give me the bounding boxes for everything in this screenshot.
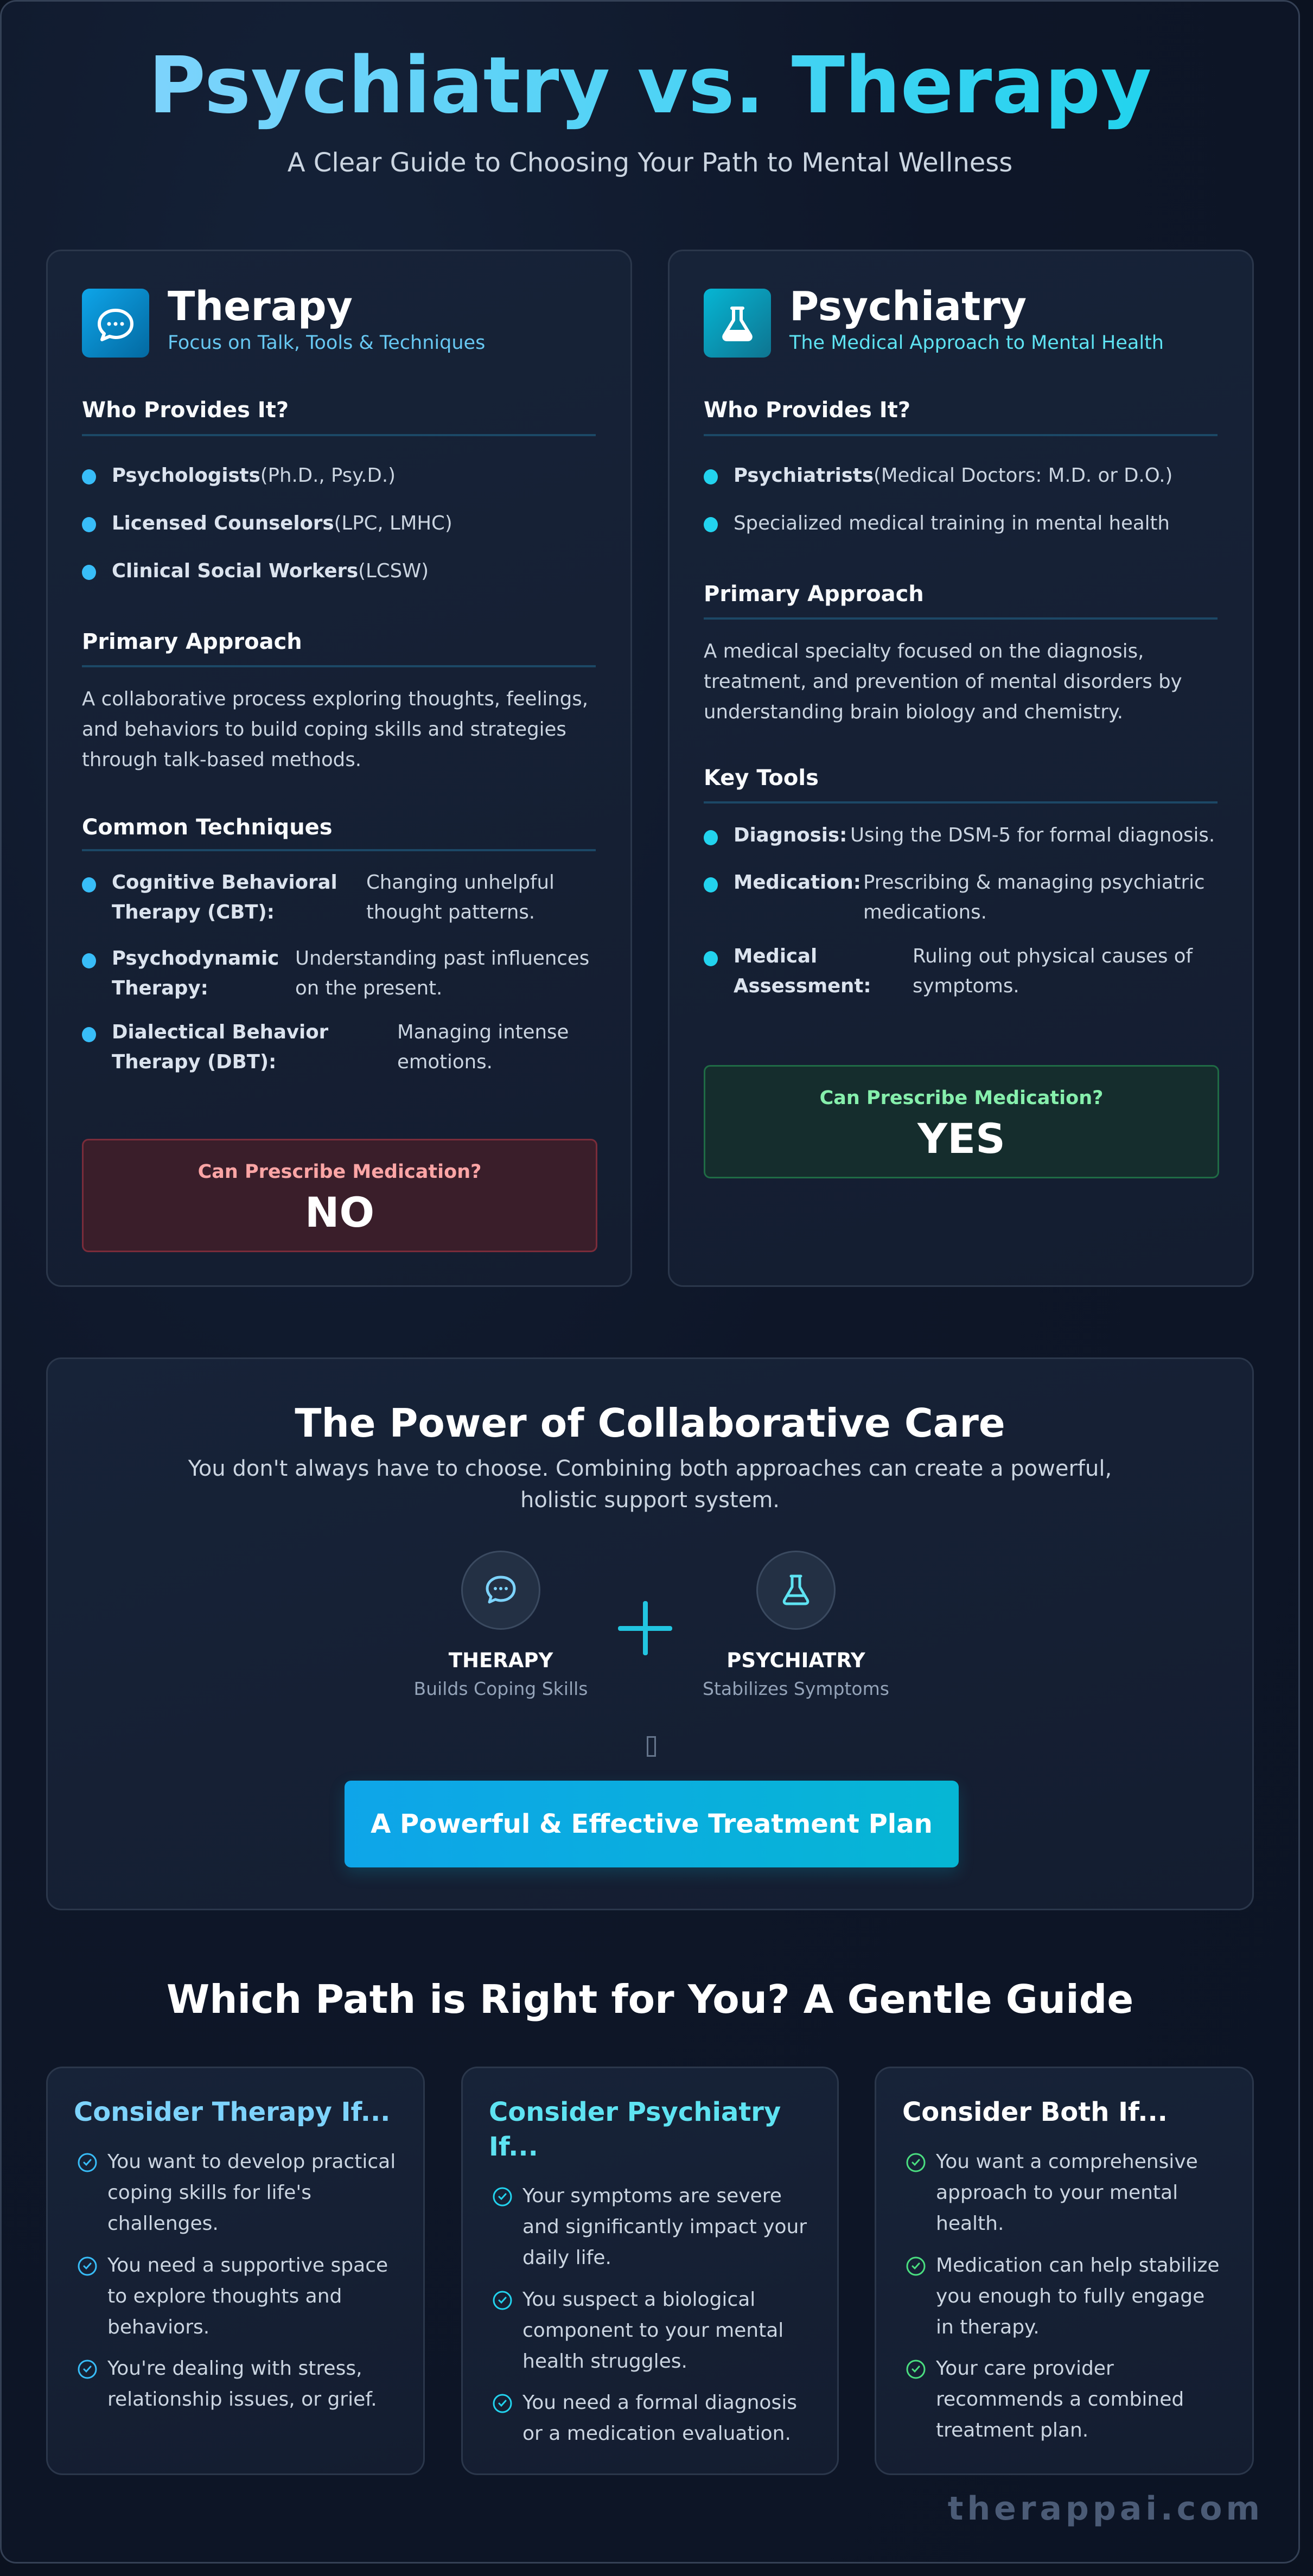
text: approach: treatment, and prevention of mental disorders by [704,671,1182,693]
button: treatment plan: A Powerful & Effective Treatment Plan [371,1809,933,1839]
item list: component to your mental [522,2319,783,2342]
item list: coping skills for life's [107,2182,311,2204]
card: both [875,2067,1254,2475]
heading: Psychiatry: Psychiatry [789,283,1027,330]
heading: who provides: Who Provides It? [82,398,289,423]
card: therapy [46,2067,425,2475]
item list: You want to develop practical [107,2151,396,2173]
item list: You suspect a biological [522,2288,755,2311]
list: techniques: Therapy: [112,977,208,999]
item list: daily life. [522,2247,611,2269]
item list: behaviors. [107,2316,209,2338]
panel: psychiatry [668,250,1254,1287]
list: key tools: Using the DSM-5 for formal diagnosis. [850,824,1215,846]
text: approach: A collaborative process exploring thoughts, feelings, [82,688,588,710]
list: providers [704,464,1172,534]
subheading: The Medical Approach to Mental Health [789,332,1164,354]
item list: Your symptoms are severe [522,2185,782,2207]
callout: NO [82,1139,597,1252]
list: techniques: Changing unhelpful [366,871,554,894]
item list [78,2151,396,2411]
item list: health struggles. [522,2350,687,2373]
arrow glyph (missing) [647,1736,656,1757]
item list: Medication can help stabilize [936,2254,1220,2277]
item list: You want a comprehensive [936,2151,1198,2173]
list: key tools: Ruling out physical causes of [913,945,1193,967]
callout: NO: NO [305,1188,374,1236]
list: techniques: Understanding past influences [295,947,589,970]
item list: You need a supportive space [107,2254,388,2277]
heading: who provides: Who Provides It? [704,398,910,423]
card: both: Consider Both If... [902,2097,1168,2127]
card: psychiatry: Consider Psychiatry [489,2097,781,2127]
list: techniques: Therapy (CBT): [112,901,275,923]
list: techniques: thought patterns. [366,901,535,923]
item list [906,2151,1220,2441]
list: key tools: Medication: [734,871,861,894]
icon: psychiatry circle [756,1551,836,1630]
callout: YES: YES [917,1114,1005,1163]
item list: You need a formal diagnosis [522,2392,797,2414]
card: therapy: Consider Therapy If... [74,2097,390,2127]
text: intro: You don't always have to choose. Combining both approaches can create a powerful, [188,1456,1112,1481]
icon: therapy circle [461,1551,540,1630]
list: techniques: on the present. [295,977,442,999]
heading: primary approach: Primary Approach [704,582,924,607]
list: key tools: Assessment: [734,975,871,997]
item list: you enough to fully engage [936,2285,1204,2307]
card: psychiatry [461,2067,839,2475]
text: intro: holistic support system. [520,1488,780,1513]
list: key tools: medications. [863,901,987,923]
item list: Your care provider [936,2357,1114,2380]
label: therapy: THERAPY [449,1649,553,1672]
text: intro [188,1456,1112,1513]
callout: NO: Can Prescribe Medication? [198,1161,481,1183]
heading: The Power of Collaborative Care [295,1400,1005,1446]
list: providers: Specialized medical training in mental health [734,512,1170,534]
list: techniques: Psychodynamic [112,947,279,970]
label: psychiatry [703,1649,889,1699]
list: key tools: Diagnosis: [734,824,847,846]
label: psychiatry: Stabilizes Symptoms [703,1678,889,1699]
panel: collaborative care [46,1357,1254,1910]
panel: therapy [46,250,632,1287]
item list: health. [936,2212,1004,2235]
text: approach [82,688,588,771]
text: approach: understanding brain biology and chemistry. [704,701,1123,723]
card: psychiatry: or a medication evaluation. [522,2422,791,2445]
list: key tools: Prescribing & managing psychiatric [863,871,1204,894]
callout: YES: Can Prescribe Medication? [820,1087,1103,1109]
item list: to explore thoughts and [107,2285,342,2307]
button: treatment plan [345,1781,959,1867]
heading: Therapy: Therapy [168,283,353,330]
item list: in therapy. [936,2316,1040,2338]
heading: which path: Which Path is Right for You? A Gentle Guide [167,1976,1133,2022]
list: key tools: symptoms. [913,975,1019,997]
title: Psychiatry vs. Therapy [149,40,1151,131]
icon: flask [704,289,771,358]
card: therapy: relationship issues, or grief. [107,2388,377,2411]
list: providers: Psychiatrists(Medical Doctors: M.D. or D.O.) [734,464,1172,487]
subtitle: A Clear Guide to Choosing Your Path to Mental Wellness [288,148,1012,178]
item list: challenges. [107,2212,219,2235]
list: providers: Clinical Social Workers(LCSW) [112,560,429,582]
list: providers: Psychologists(Ph.D., Psy.D.) [112,464,396,487]
list: techniques [82,871,589,1073]
heading: common techniques: Common Techniques [82,815,333,840]
list: providers [82,464,452,582]
list: providers: Licensed Counselors(LPC, LMHC) [112,512,452,534]
watermark: therappai.com [948,2490,1264,2528]
item list: You're dealing with stress, [107,2357,362,2380]
card: psychiatry: If... [489,2132,538,2162]
text: approach: through talk-based methods. [82,749,361,771]
list: key tools: Medical [734,945,817,967]
text: approach: A medical specialty focused on the diagnosis, [704,640,1144,662]
callout: YES [704,1065,1219,1178]
text: approach [704,640,1182,723]
list: techniques: Therapy (DBT): [112,1051,276,1073]
heading: primary approach: Primary Approach [82,629,302,654]
text: approach: and behaviors to build coping skills and strategies [82,718,566,741]
item list: and significantly impact your [522,2216,807,2238]
label: therapy [413,1649,588,1699]
label: psychiatry: PSYCHIATRY [726,1649,865,1672]
item list [493,2185,807,2445]
heading: key tools: Key Tools [704,766,819,790]
list: techniques: Cognitive Behavioral [112,871,337,894]
subheading: Focus on Talk, Tools & Techniques [168,332,485,354]
item list: approach to your mental [936,2182,1178,2204]
icon: plus [618,1601,672,1655]
list: techniques: Managing intense [397,1021,569,1043]
label: therapy: Builds Coping Skills [413,1678,588,1699]
list: key tools [704,824,1215,997]
card: both: recommends a combined [936,2388,1184,2411]
card: both: treatment plan. [936,2419,1088,2441]
list: techniques: Dialectical Behavior [112,1021,328,1043]
list: techniques: emotions. [397,1051,493,1073]
icon: chat bubble [82,289,149,358]
